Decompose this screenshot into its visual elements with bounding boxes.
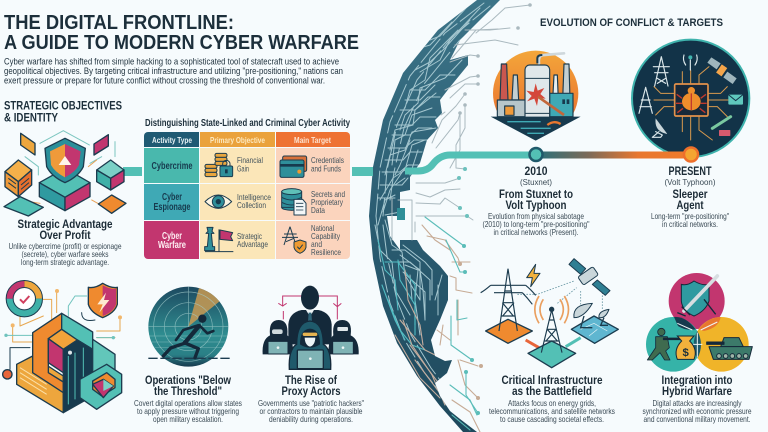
lightning bolt [527,264,540,287]
globe: circuit continent [369,0,500,432]
text block: rise of proxy actors: deniability during operations. [269,414,353,424]
globe: inner circuit traces [375,3,497,405]
left hooded figure [263,320,293,354]
table first column labels [152,160,193,251]
text block: hybrid warfare [642,373,752,424]
orange plate [486,319,532,343]
timeline text: 2010 stuxnet: (Stuxnet) [520,177,552,187]
text block: critical infrastructure: Attacks focus on energy grids, [508,398,596,408]
table cell text: Gain [237,164,249,174]
connector: globe to table [352,167,373,176]
text block: operations below the threshold: Operations "Below [145,373,232,387]
timeline text: present volt typhoon [651,164,729,229]
suited figure [288,286,332,344]
text block: rise of proxy actors: or contractors to maintain plausible [260,406,363,416]
title [4,12,359,54]
central hooded figure [289,321,331,369]
soldier [647,328,682,360]
text block: hybrid warfare: Digital attacks are increasingly [652,398,742,408]
timeline node: 2010 [530,148,542,161]
dashed links [517,281,602,309]
timeline text: 2010 stuxnet: in critical networks (Present). [494,227,578,237]
runner [163,316,213,358]
icon: radar with running figure [148,284,230,367]
satellite [569,259,610,295]
timeline [405,148,698,171]
blue plate [571,316,618,343]
timeline text: 2010 stuxnet: Volt Typhoon [506,198,566,212]
section heading: evolution: EVOLUTION OF CONFLICT & TARGETS [540,17,723,29]
table cell text: Intelligence [237,192,271,202]
text block: operations below the threshold: the Threshold" [154,384,222,398]
icon: shield on isometric platform [4,131,126,216]
tank [707,338,752,359]
table icons [205,153,307,253]
section heading: strategic objectives: STRATEGIC OBJECTIVES [4,98,122,112]
section heading: strategic objectives: & IDENTITY [4,110,58,124]
timeline text: present volt typhoon: PRESENT [668,164,712,178]
text block: critical infrastructure: Critical Infrastructure [502,373,603,387]
icon: layered isometric blocks [3,283,122,413]
table header row: Activity Type [152,135,192,145]
text block: strategic advantage over profit: Over Profit [40,228,91,242]
table first column labels: Cyber [162,191,182,203]
ring chart [10,284,39,313]
table cell text: Collection [237,200,266,210]
shield and sword [677,276,717,316]
table cell text: National [311,223,334,233]
table header row: Primary Objective [210,135,265,145]
table first column labels: Warfare [158,239,186,251]
table heading: Distinguishing State-Linked and Criminal Cyber Activity [145,118,350,129]
icon: proxy actors [263,286,359,369]
title: THE DIGITAL FRONTLINE: [4,12,234,34]
table cell text: Strategic [237,231,263,241]
table cell text: Proprietary [311,197,344,207]
text block: hybrid warfare: Hybrid Warfare [662,384,732,398]
text block: strategic advantage over profit [8,217,122,267]
timeline text: 2010 stuxnet: 2010 [524,164,548,178]
intro paragraph [4,56,343,86]
table first column labels: Cybercrime [152,160,193,172]
intro paragraph: exert pressure or prepare for future conflict without crossing the threshold of conventional war. [4,76,325,86]
lightning shield [88,283,117,318]
table header row: Main Target [294,135,331,145]
table cell text: Advantage [237,239,268,249]
table cell text: Capability [311,231,341,241]
timeline text: present volt typhoon: in critical networks. [662,219,718,229]
text block: rise of proxy actors: Proxy Actors [282,384,341,398]
text block: operations below the threshold [134,373,242,424]
intro paragraph: Cyber warfare has shifted from simple hacking to a sophisticated tool of statecraft used to achieve [4,56,339,66]
title: A GUIDE TO MODERN CYBER WARFARE [4,32,359,54]
timeline node: present [684,148,698,162]
icon: sabotaged industrial plant [491,51,581,141]
timeline text: 2010 stuxnet: From Stuxnet to [499,187,573,201]
text block: critical infrastructure [489,373,615,424]
timeline text: 2010 stuxnet: Evolution from physical sabotage [488,211,584,221]
timeline text: present volt typhoon: (Volt Typhoon) [664,177,716,187]
section heading: strategic objectives [4,98,122,124]
comparison table [144,132,350,259]
timeline text: present volt typhoon: Sleeper [672,187,708,201]
table cell text: Financial [237,155,263,165]
icon: critical infrastructure network [481,259,618,368]
text block: strategic advantage over profit: Unlike cybercrime (profit) or espionage [8,241,122,251]
intro paragraph: geopolitical objectives. By targeting critical infrastructure and utilizing "pre-positioning," nations can [4,66,343,76]
table first column labels: Cyber [162,230,182,242]
table cell text: and Funds [311,164,341,174]
text block: strategic advantage over profit: Strategic Advantage [18,217,113,231]
timeline text: present volt typhoon: Long-term "pre-positioning" [651,211,729,221]
text block: operations below the threshold: to apply pressure without triggering [137,406,239,416]
dishes [574,303,609,328]
table header row [152,135,331,145]
timeline text: present volt typhoon: Agent [676,198,704,212]
text block: critical infrastructure: telecommunications, and satellite networks [489,406,615,416]
globe: outer circuit traces [392,3,532,432]
text block: operations below the threshold: open military escalation. [153,414,223,424]
bug [676,87,707,113]
text block: rise of proxy actors: The Rise of [285,373,337,387]
text block: operations below the threshold: Covert digital operations allow states [134,398,242,408]
timeline text: 2010 stuxnet: (2010) to long-term "pre-positioning" [482,219,590,229]
teal plate [528,341,576,368]
text block: strategic advantage over profit: (secrete), cyber warfare seeks [22,249,108,259]
table cell text: Data [311,205,325,215]
right hooded figure [328,320,359,354]
money bag: $ [683,347,690,359]
table cell text [237,155,345,257]
table cell text: and [311,239,322,249]
text block: critical infrastructure: as the Battlefield [512,384,592,398]
table cell text: Resilience [311,247,341,257]
timeline text: 2010 stuxnet [482,164,590,237]
text block: critical infrastructure: to cause cascading societal effects. [500,414,604,424]
icon: hybrid warfare venn diagram [646,273,752,372]
icon: sleeper agent circuit globe [632,40,749,157]
table first column labels: Espionage [154,201,191,213]
text block: rise of proxy actors: Governments use "patriotic hackers" [258,398,364,408]
connector: icon to table [123,167,142,176]
text block: strategic advantage over profit: long-term strategic advantage. [21,257,109,267]
table cell text: Secrets and [311,189,345,199]
table cell text: Credentials [311,155,344,165]
text block: hybrid warfare: Integration into [662,373,732,387]
text block: rise of proxy actors [258,373,364,424]
